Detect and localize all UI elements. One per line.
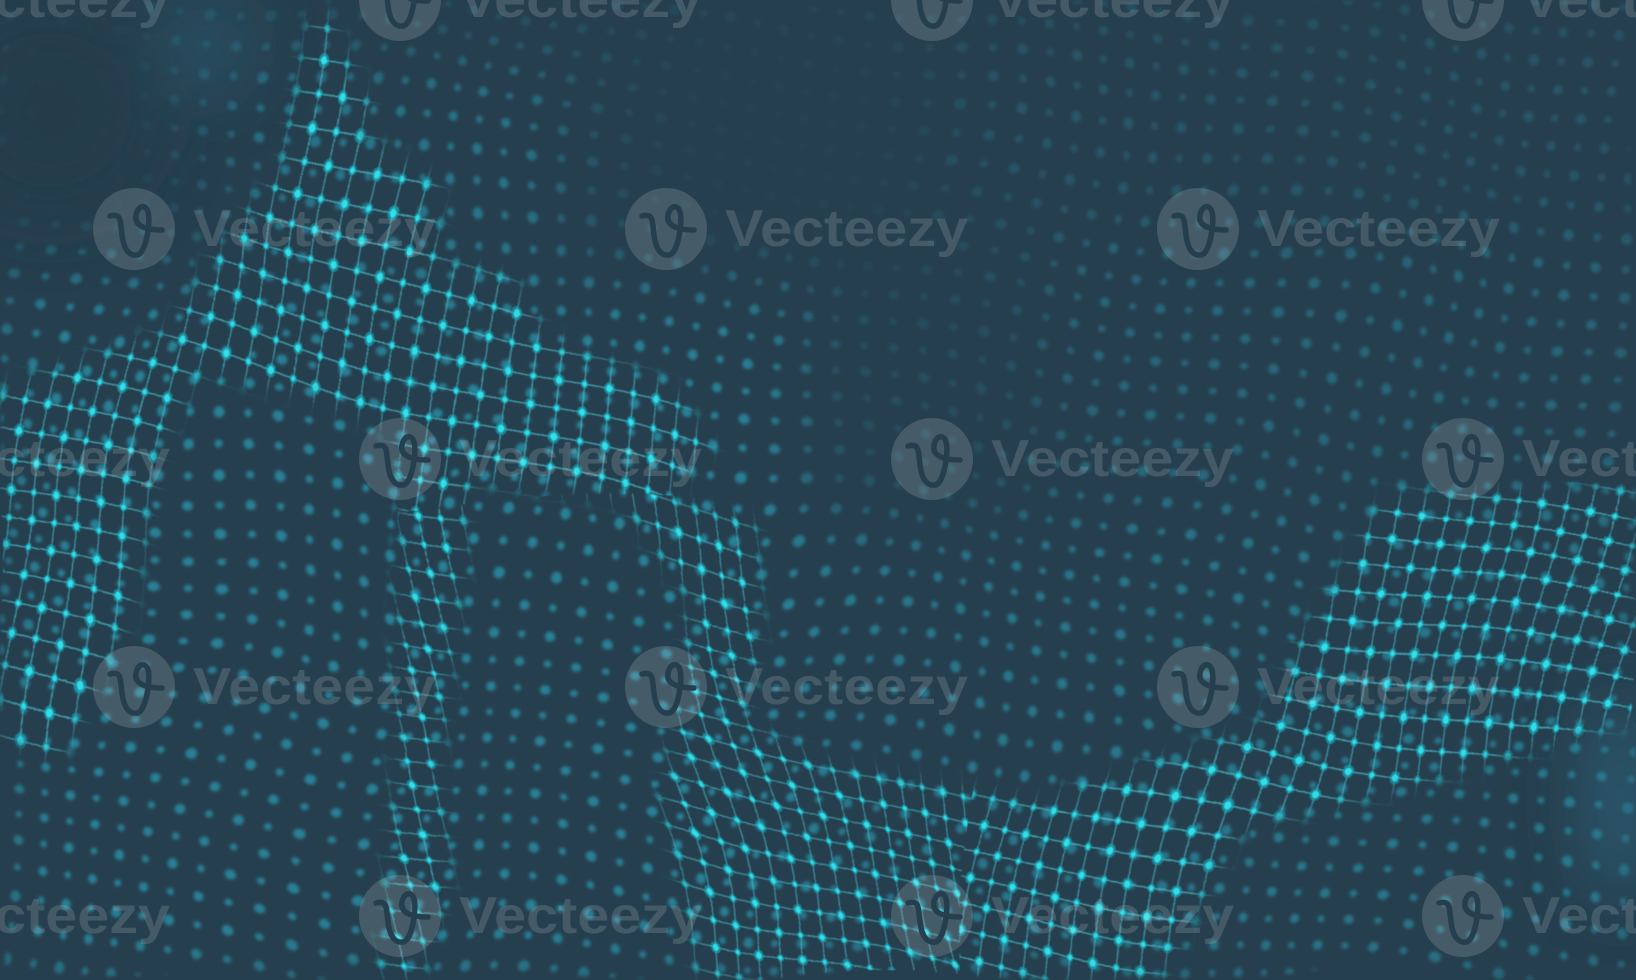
watermark row 4: Vecteezy [459,887,702,945]
watermark row 1 [93,188,1500,270]
watermark row 1: Vecteezy [193,200,436,258]
watermark row 4: Vecteezy [991,887,1234,945]
watermark row 2: Vecteezy [459,430,702,488]
watermark row 1: Vecteezy [1257,200,1500,258]
watermark row 1: Vecteezy [725,200,968,258]
watermark row 4 [0,875,1636,957]
watermark row 2 [0,418,1636,500]
watermark row 3: Vecteezy [1257,658,1500,716]
watermark row 3: Vecteezy [193,658,436,716]
watermark row 2: Vecteezy [991,430,1234,488]
watermark row 0 [0,0,1636,41]
watermark row 3: Vecteezy [725,658,968,716]
watermark row 3 [93,646,1500,728]
